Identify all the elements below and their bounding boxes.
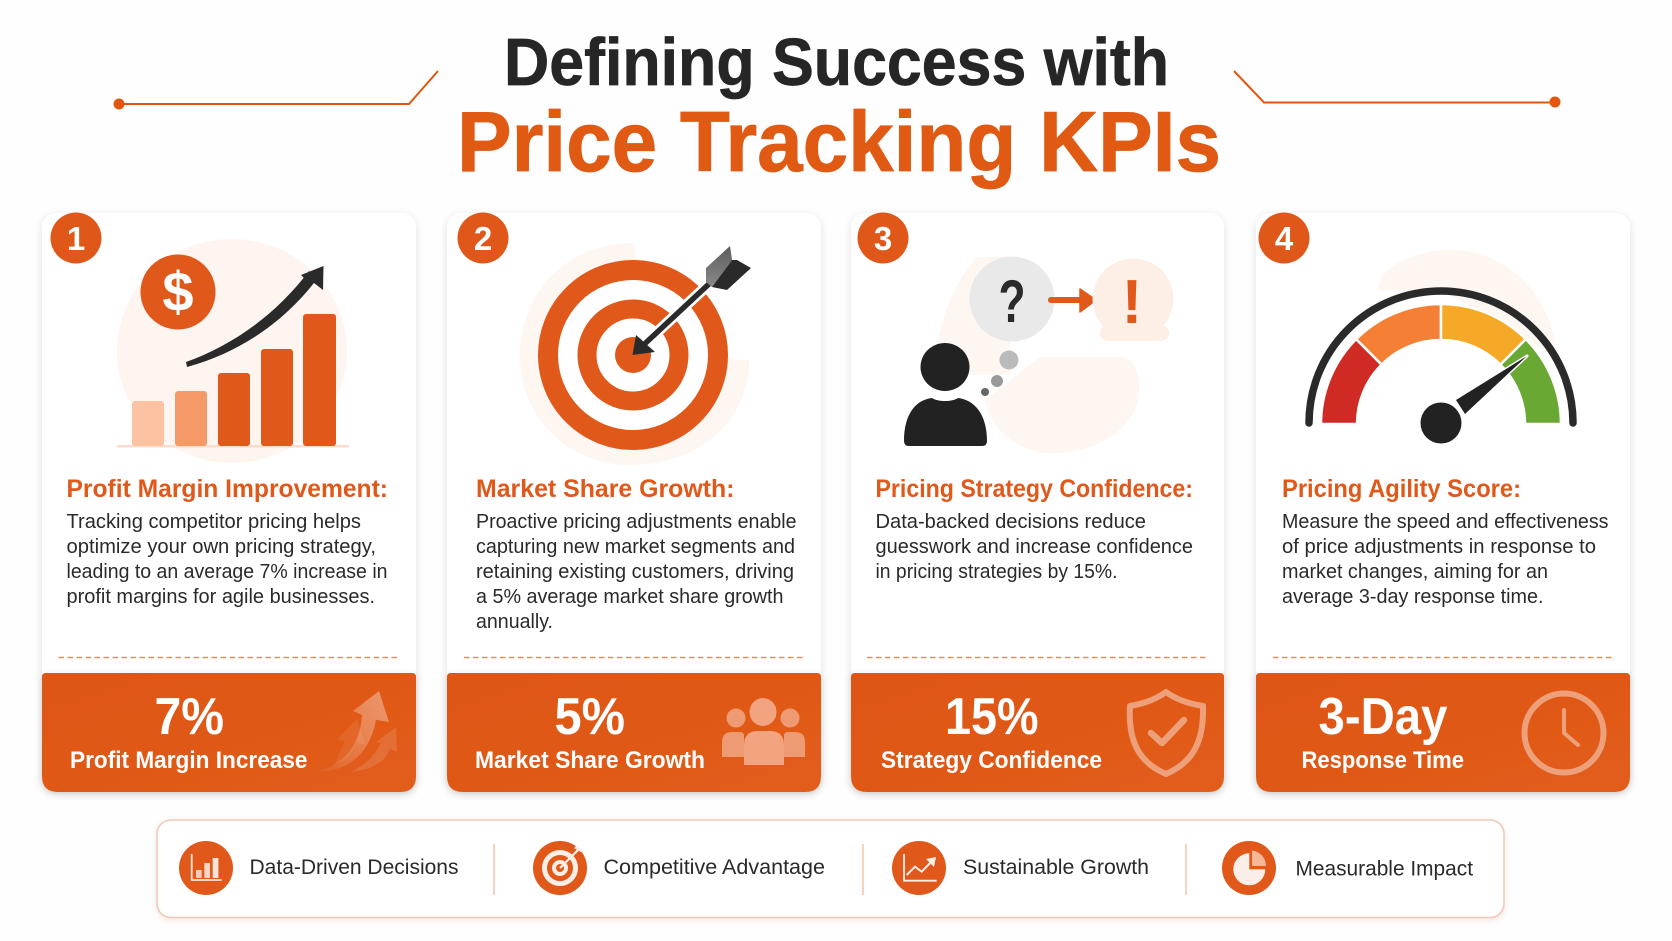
icon: target with arrow — [520, 243, 751, 465]
icon: shield check — [1130, 692, 1203, 774]
body text — [66, 510, 388, 608]
number badge 4 — [1258, 212, 1310, 264]
icon: person question to insight: ? — [998, 268, 1026, 335]
label: competitive advantage: Competitive Advantage — [604, 855, 825, 879]
number badge 3: 3 — [874, 220, 892, 257]
body text: average 3-day response time. — [1282, 585, 1544, 608]
title line 2: Price Tracking KPIs — [457, 95, 1221, 190]
value: 3-Day — [1318, 688, 1448, 746]
body text: guesswork and increase confidence — [876, 535, 1193, 558]
body text: capturing new market segments and — [476, 535, 795, 558]
heading: Market Share Growth: — [476, 475, 734, 503]
body text: profit margins for agile businesses. — [66, 585, 375, 608]
footer strip — [157, 820, 1504, 918]
heading: Pricing Agility Score: — [1282, 475, 1521, 503]
icon: pie chart — [1222, 841, 1276, 895]
icon: person question to insight — [904, 256, 1174, 453]
heading: Pricing Strategy Confidence: — [876, 475, 1193, 503]
icon: line chart — [892, 841, 946, 895]
panel: profit margin improvement — [42, 212, 416, 792]
value: 15% — [945, 688, 1038, 746]
body text — [476, 510, 796, 633]
title — [457, 25, 1221, 190]
heading: Profit Margin Improvement: — [66, 475, 388, 503]
number badge 1: 1 — [67, 220, 85, 257]
body text: leading to an average 7% increase in — [66, 560, 388, 583]
body text: annually. — [476, 610, 553, 633]
stat band — [447, 673, 821, 792]
icon: person question to insight: ! — [1122, 268, 1142, 337]
label: Profit Margin Increase — [70, 747, 308, 774]
body text: a 5% average market share growth — [476, 585, 784, 608]
title line 1: Defining Success with — [504, 25, 1169, 100]
number badge 2 — [458, 212, 508, 264]
number badge 4: 4 — [1275, 220, 1294, 257]
body text: retaining existing customers, driving — [476, 560, 794, 583]
value: 5% — [554, 688, 625, 746]
stat band — [42, 673, 416, 792]
title accent right — [1234, 71, 1560, 108]
label: sustainable growth: Sustainable Growth — [963, 855, 1149, 879]
body text: of price adjustments in response to — [1282, 535, 1596, 558]
icon: bar chart — [179, 841, 233, 895]
icon: clock — [1524, 694, 1604, 772]
stat band — [1256, 673, 1630, 792]
icon: speedometer gauge — [1309, 250, 1573, 444]
icon: growth arrows — [315, 691, 397, 772]
label: data-driven decisions: Data-Driven Decisions — [250, 855, 458, 879]
value: 7% — [154, 688, 224, 746]
body text: Measure the speed and effectiveness — [1282, 510, 1608, 533]
label: Response Time — [1302, 747, 1464, 774]
icon: target — [533, 841, 587, 895]
panel: market share growth — [447, 212, 821, 792]
panel: pricing agility score — [1256, 212, 1630, 792]
icon: people — [722, 698, 805, 765]
panel: pricing strategy confidence — [851, 212, 1224, 792]
icon: rising bars with dollar: $ — [162, 260, 194, 323]
label: Market Share Growth — [475, 747, 705, 774]
body text — [876, 510, 1193, 583]
title accent left — [114, 71, 438, 110]
number badge 1 — [50, 212, 102, 264]
icon: rising bars with dollar — [117, 239, 349, 463]
number badge 2: 2 — [474, 220, 492, 257]
body text: Tracking competitor pricing helps — [66, 510, 361, 533]
label: measurable impact: Measurable Impact — [1296, 856, 1473, 880]
stat band — [851, 673, 1224, 792]
body text: Proactive pricing adjustments enable — [476, 510, 796, 533]
label: Strategy Confidence — [881, 747, 1102, 774]
body text — [1282, 510, 1608, 608]
body text: Data-backed decisions reduce — [876, 510, 1146, 533]
number badge 3 — [858, 212, 908, 264]
body text: optimize your own pricing strategy, — [66, 535, 376, 558]
body text: in pricing strategies by 15%. — [876, 560, 1118, 583]
body text: market changes, aiming for an — [1282, 560, 1548, 583]
